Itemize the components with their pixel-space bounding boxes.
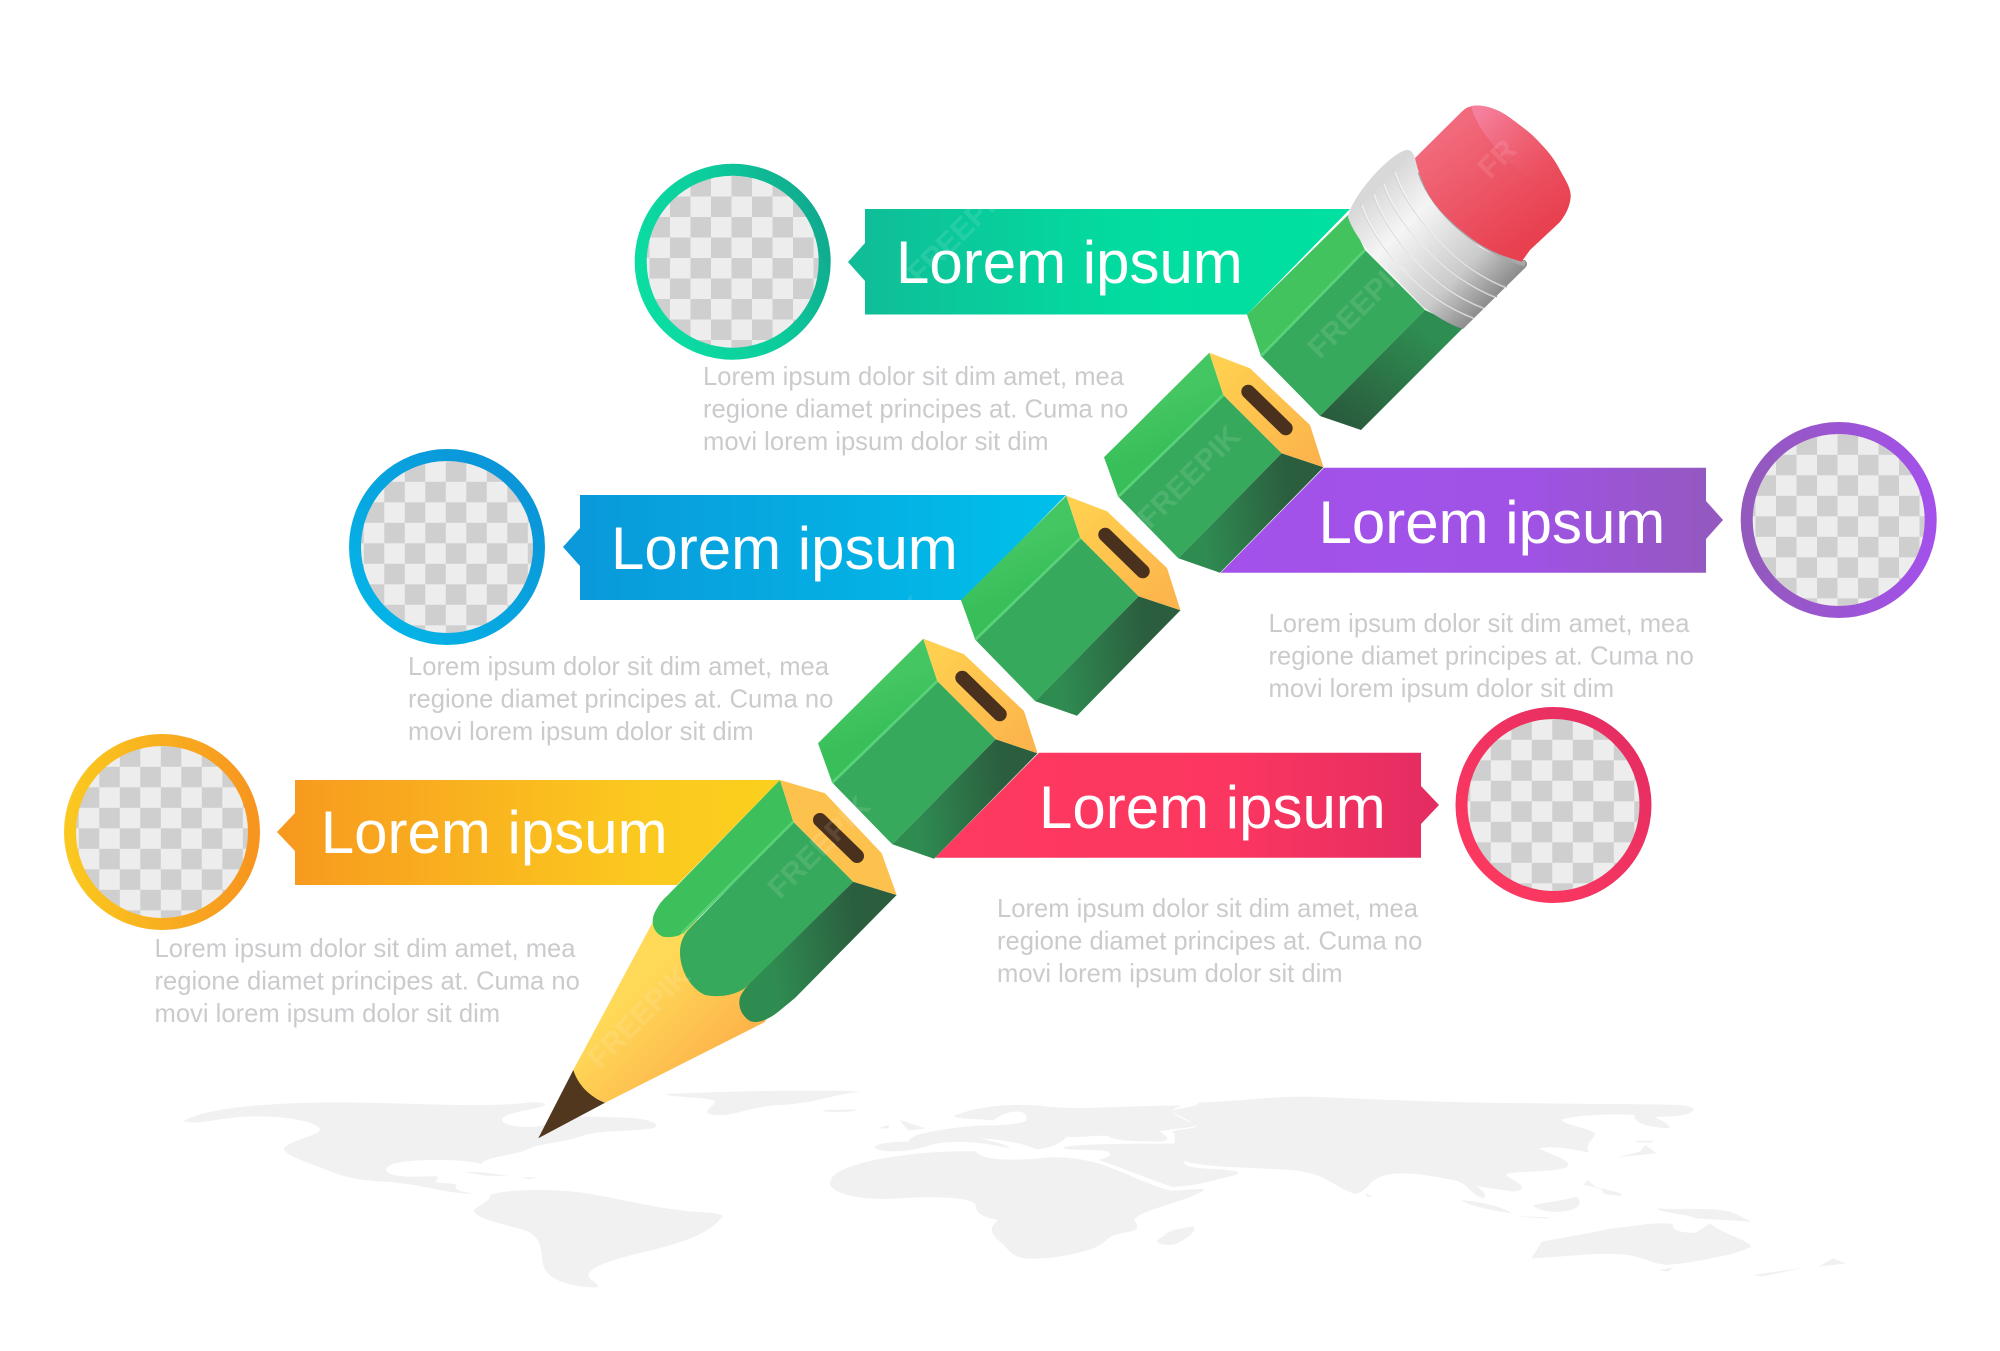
- text: purple description: movi lorem ipsum dolor sit dim: [1268, 675, 1614, 703]
- pencil: pink eraser: [1415, 106, 1571, 262]
- banner: purple: [1221, 468, 1723, 573]
- pencil: metal ferrule: [1348, 150, 1527, 329]
- step: red: [997, 713, 1646, 988]
- step: orange: [70, 740, 668, 1028]
- text: teal description: Lorem ipsum dolor sit dim amet, mea: [703, 363, 1125, 391]
- pencil: segment 3: [818, 639, 1038, 859]
- banner: red: [935, 753, 1439, 858]
- circle: red placeholder: [1462, 713, 1646, 897]
- text: purple description: Lorem ipsum dolor sit dim amet, mea: [1268, 610, 1690, 638]
- text: orange description: regione diamet principes at. Cuma no: [154, 967, 580, 995]
- circle: orange placeholder: [70, 740, 254, 924]
- text: blue description: movi lorem ipsum dolor sit dim: [408, 718, 754, 746]
- pencil: [538, 106, 1571, 1138]
- heading: red: Lorem ipsum: [1039, 774, 1386, 841]
- text: teal description: movi lorem ipsum dolor sit dim: [703, 428, 1049, 456]
- banner: teal: [848, 209, 1350, 314]
- banner: blue: [563, 495, 1066, 600]
- step: blue: [355, 455, 958, 746]
- watermark: FREEPIK: [1302, 249, 1417, 365]
- watermark: [582, 133, 1523, 1075]
- pencil: graphite lead: [538, 1070, 605, 1138]
- heading: teal: Lorem ipsum: [896, 229, 1243, 296]
- watermark: FREEPIK: [1132, 419, 1247, 535]
- circle: blue placeholder: [355, 455, 539, 639]
- heading: blue: Lorem ipsum: [611, 515, 958, 582]
- step: teal: [641, 170, 1243, 456]
- text: red description: regione diamet principes at. Cuma no: [997, 927, 1422, 955]
- watermark: FREEPIK: [762, 789, 877, 905]
- world map: [183, 1091, 1846, 1288]
- watermark: FREEPIK: [582, 959, 697, 1075]
- text: blue description: Lorem ipsum dolor sit dim amet, mea: [408, 653, 830, 681]
- pencil: segment 2: [961, 496, 1180, 716]
- circle: purple placeholder: [1747, 428, 1931, 612]
- text: red description: Lorem ipsum dolor sit dim amet, mea: [997, 895, 1419, 923]
- text: purple description: regione diamet principes at. Cuma no: [1268, 642, 1694, 670]
- pencil: sharpened wood tip: [573, 918, 790, 1103]
- watermark: FREEPIK: [817, 589, 932, 705]
- text: blue description: regione diamet principes at. Cuma no: [408, 685, 833, 713]
- pencil: bottom segment: [653, 780, 897, 1022]
- text: teal description: regione diamet principes at. Cuma no: [703, 395, 1128, 423]
- watermark: FREEPIK: [902, 174, 1017, 290]
- text: orange description: movi lorem ipsum dolor sit dim: [154, 1000, 500, 1028]
- text: red description: movi lorem ipsum dolor sit dim: [997, 960, 1343, 988]
- heading: orange: Lorem ipsum: [321, 799, 668, 866]
- pencil: segment 1: [1104, 353, 1324, 573]
- step: purple: [1268, 428, 1931, 703]
- banner: orange: [277, 780, 780, 885]
- watermark: FR: [1472, 133, 1523, 185]
- heading: purple: Lorem ipsum: [1318, 489, 1665, 556]
- text: orange description: Lorem ipsum dolor sit dim amet, mea: [154, 935, 576, 963]
- pencil: eraser-end segment: [1247, 215, 1463, 430]
- circle: teal placeholder: [641, 170, 825, 354]
